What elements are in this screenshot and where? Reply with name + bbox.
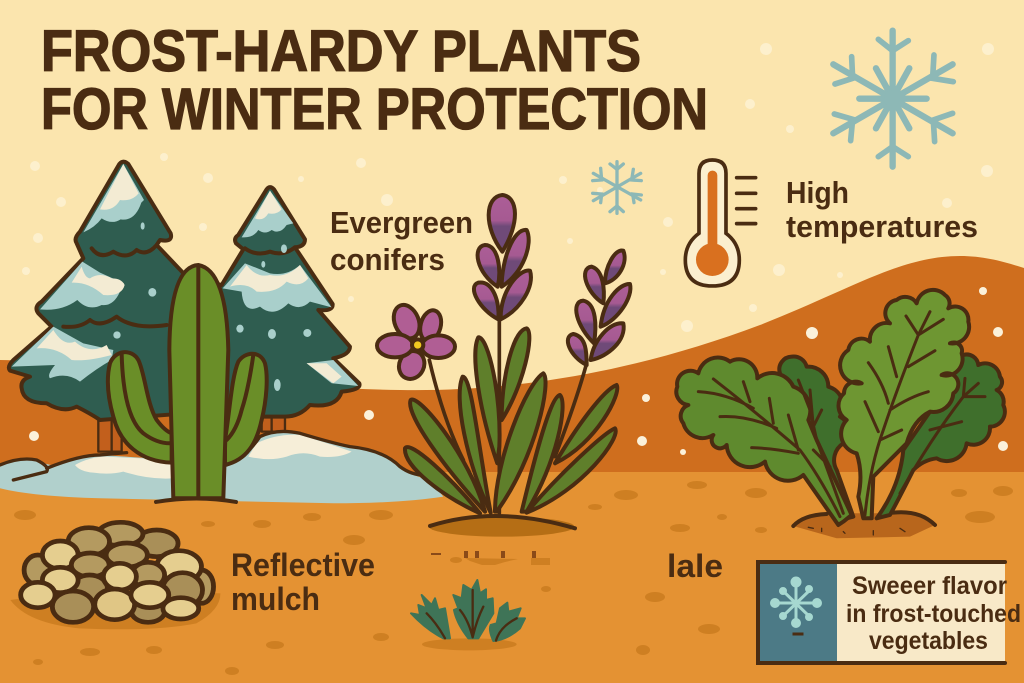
heading: FOR WINTER PROTECTION bbox=[41, 77, 708, 142]
label: reflective mulch: mulch bbox=[231, 581, 320, 617]
right arm bbox=[225, 354, 267, 465]
thermometer body bbox=[685, 160, 739, 286]
ground shadow bbox=[10, 590, 220, 629]
snow on top tier bbox=[83, 164, 144, 232]
icon: large snowflake bbox=[833, 31, 953, 167]
sandy ground bbox=[0, 472, 1024, 683]
snow mound bbox=[0, 431, 443, 503]
icon: small snowflake bbox=[593, 162, 641, 213]
label: evergreen conifers bbox=[330, 205, 473, 277]
foliage scallops bbox=[245, 247, 295, 254]
snow on lower tier bbox=[307, 360, 358, 386]
front leaf: left bbox=[676, 358, 852, 525]
mulch stone pile bbox=[10, 522, 220, 629]
tree: large conifer bbox=[9, 162, 187, 452]
label: evergreen conifers: conifers bbox=[330, 242, 445, 277]
tree trunk bbox=[98, 417, 122, 452]
tree trunk bbox=[262, 410, 285, 432]
label: reflective mulch bbox=[231, 547, 375, 617]
shrub stems bbox=[427, 590, 517, 641]
snow on top tier bbox=[242, 191, 293, 237]
snow on middle tier bbox=[223, 263, 332, 312]
card text: vegetables bbox=[869, 627, 988, 655]
shrub leaves bbox=[411, 595, 450, 638]
card background bbox=[758, 561, 1005, 663]
card text bbox=[846, 572, 1021, 655]
main stem bbox=[169, 265, 228, 498]
back leaf: left bbox=[779, 357, 853, 520]
leaves bbox=[405, 328, 617, 513]
label: evergreen conifers: Evergreen bbox=[330, 205, 473, 240]
label: high temperatures: temperatures bbox=[786, 209, 978, 244]
soil speckles bbox=[14, 481, 1013, 675]
front leaf: centre bbox=[839, 290, 969, 518]
soil mound bbox=[793, 513, 935, 538]
mound outline bbox=[0, 431, 430, 480]
left arm bbox=[108, 352, 172, 463]
foliage scallops bbox=[63, 245, 167, 327]
snow on middle tier bbox=[40, 262, 124, 310]
pink flower bbox=[377, 301, 455, 383]
scale ticks bbox=[737, 178, 756, 224]
snowflakes on tree bbox=[141, 222, 145, 230]
orange hill bbox=[0, 256, 1024, 480]
lavender and flower plant bbox=[377, 195, 630, 537]
tree: small conifer bbox=[213, 187, 360, 432]
label: high temperatures bbox=[786, 175, 978, 244]
snow dots over the hill bbox=[29, 287, 1008, 455]
icon: thermometer bbox=[685, 160, 756, 286]
soil crumbs bbox=[808, 527, 905, 535]
stones bbox=[189, 570, 214, 603]
soil mound bbox=[429, 517, 574, 537]
callout: sweeter flavor card bbox=[758, 561, 1021, 663]
snow drifts bbox=[0, 431, 443, 503]
snowflakes on tree bbox=[281, 244, 287, 253]
icon panel bbox=[758, 561, 837, 663]
card frame bbox=[758, 562, 1005, 663]
small seedling shrubs bbox=[411, 580, 525, 650]
soil shadow bbox=[422, 638, 517, 650]
label: reflective mulch: Reflective bbox=[231, 547, 375, 583]
heading: FROST-HARDY PLANTS bbox=[41, 19, 641, 84]
mercury column bbox=[708, 171, 717, 251]
stems bbox=[429, 320, 587, 513]
label: kale fragment: lale bbox=[667, 548, 723, 584]
leafy greens plant bbox=[676, 290, 1005, 538]
snow on lower tier bbox=[12, 327, 113, 382]
ground line bbox=[430, 516, 575, 528]
lavender spike: tall bbox=[474, 195, 531, 319]
white snow caps bbox=[75, 435, 352, 479]
back leaf: right bbox=[877, 354, 1005, 518]
icon: frost burst bbox=[772, 578, 820, 635]
foliage bbox=[9, 162, 187, 420]
broken soil marks bbox=[431, 551, 550, 565]
label: high temperatures: High bbox=[786, 175, 849, 210]
cactus bbox=[108, 265, 267, 502]
card text: Sweeer flavor bbox=[852, 572, 1007, 600]
foliage bbox=[213, 187, 360, 417]
lavender spike: right bbox=[568, 250, 630, 365]
ground line bbox=[156, 498, 236, 502]
falling snow dots bbox=[22, 43, 994, 332]
heading bbox=[41, 19, 708, 142]
